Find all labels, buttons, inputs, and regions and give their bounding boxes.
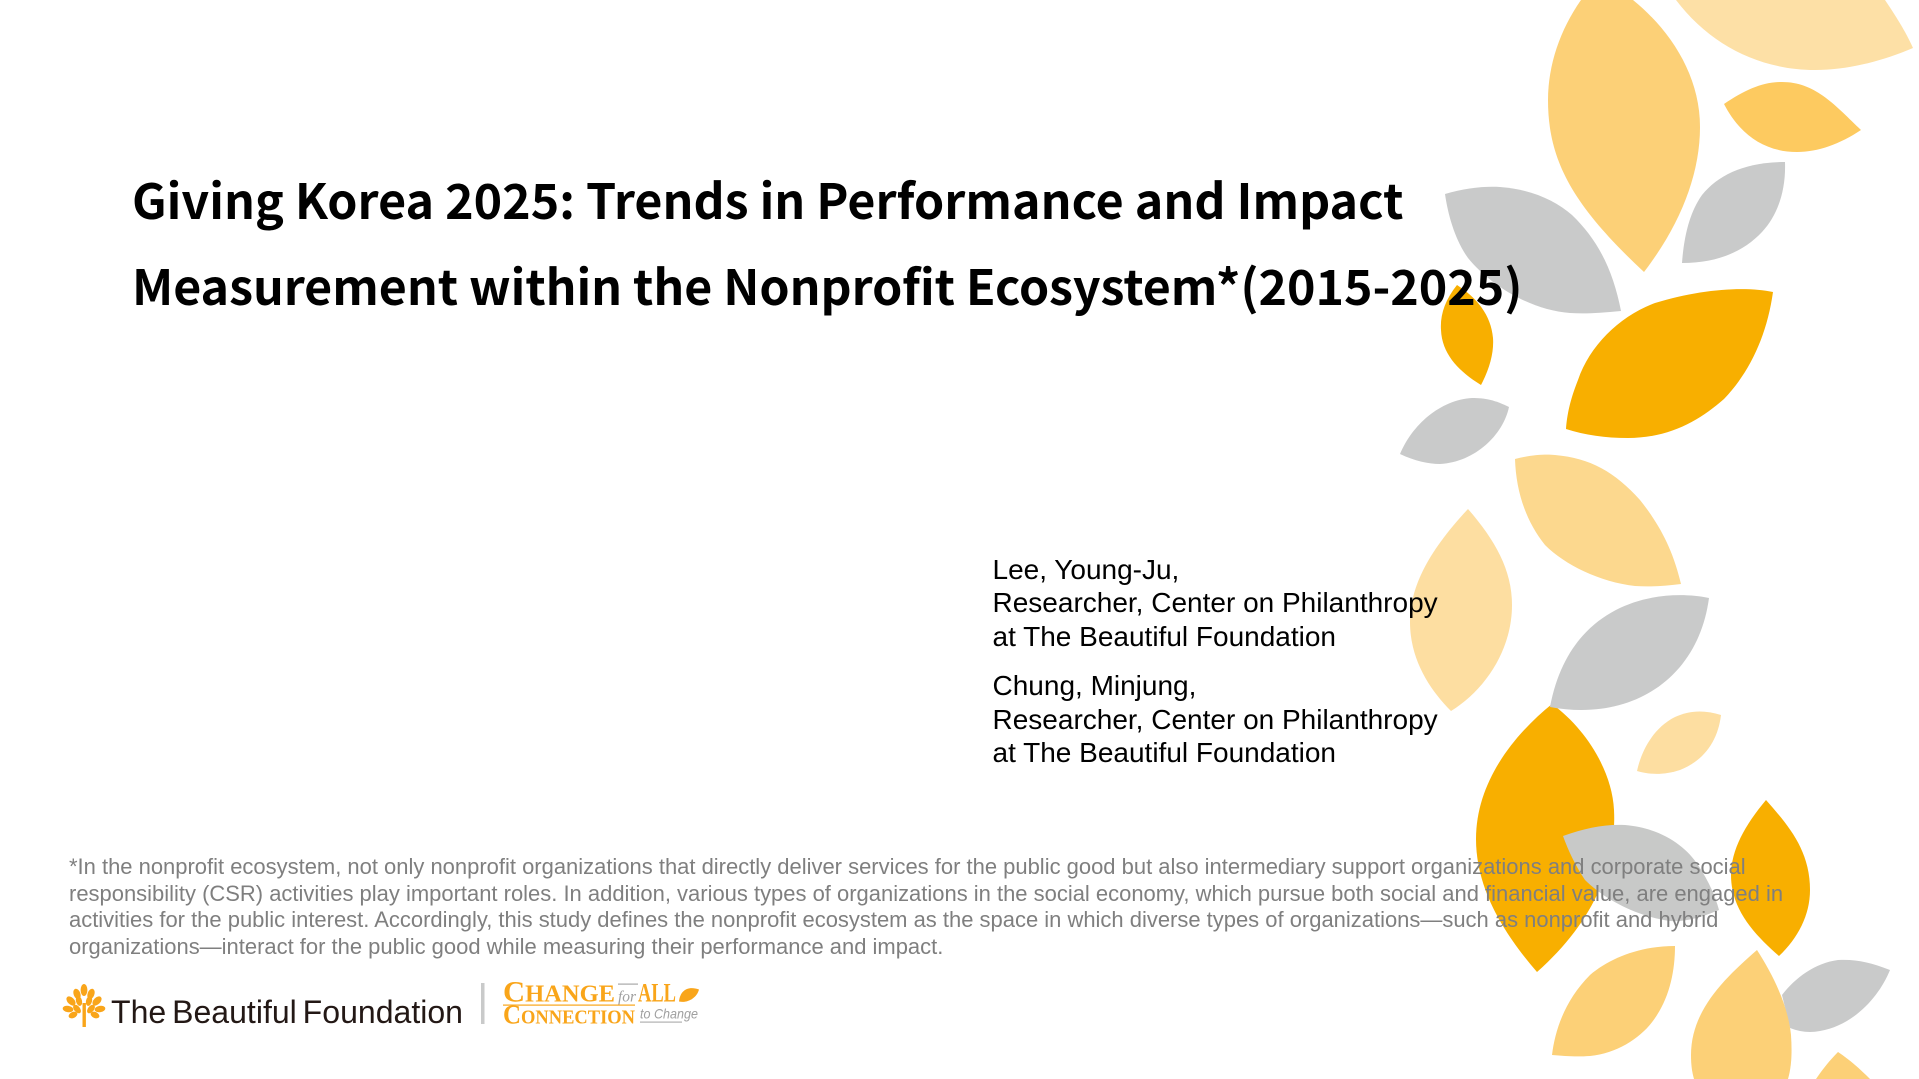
leaf: gray large bbox=[1445, 187, 1621, 313]
leaf: orange right bbox=[1731, 800, 1810, 956]
logo separator bbox=[481, 983, 484, 1024]
leaf: top right pale bbox=[1676, 0, 1913, 70]
leaf: gray overlapping bbox=[1563, 825, 1719, 921]
logo text: Change for All bbox=[503, 976, 699, 1008]
leaf: orange small bbox=[1441, 285, 1493, 385]
logos bbox=[62, 976, 699, 1030]
logo text: Connection to Change: CONNECTION bbox=[503, 1000, 636, 1030]
leaf: small yellow bbox=[1724, 82, 1861, 152]
leaf: yellow bottom bbox=[1552, 946, 1675, 1056]
leaf: yellow bottom tall bbox=[1691, 950, 1792, 1079]
leaf: small pale right bbox=[1637, 711, 1721, 774]
footnote: *In the nonprofit ecosystem, not only nonprofit organizations that directly deliver services for the public good but also intermediary support organizations and corporate social responsibility (CSR) activities play important roles. In addition, various types of organizations in the social economy, which pursue both social and financial value, are engaged in activities for the public interest. Accordingly, this study defines the nonprofit ecosystem as the space in which diverse types of organizations—such as nonprofit and hybrid organizations—interact for the public good while measuring their performance and impact. bbox=[69, 854, 1783, 959]
logo text: The Beautiful Foundation: The Beautiful Foundation bbox=[111, 994, 463, 1030]
leaf: pale middle bbox=[1515, 455, 1681, 586]
leaf: top pale yellow bbox=[1548, 0, 1700, 272]
logo text: Change for All: for bbox=[618, 988, 637, 1006]
leaf: gray small bbox=[1400, 398, 1509, 464]
icon: tree bbox=[62, 984, 106, 1027]
author: Lee, Young-Ju: Lee, Young-Ju, Researcher, Center on Philanthropy at The Beautiful Foundation bbox=[992, 554, 1438, 652]
leaf: pale vertical bbox=[1410, 509, 1512, 711]
leaf: gray bottom right bbox=[1782, 960, 1890, 1032]
title: Giving Korea 2025: Trends in Performance and Impact Measurement within the Nonprofit Ecosystem*(2015-2025) bbox=[132, 163, 1522, 319]
leaf: gray middle arc bbox=[1550, 595, 1709, 710]
leaf: gray upper right bbox=[1682, 162, 1785, 263]
logo text: Change for All: CHANGE bbox=[503, 976, 615, 1008]
leaf: corner tip bbox=[1816, 1052, 1870, 1079]
logo text: Connection to Change: to Change bbox=[640, 1006, 698, 1022]
logo text: Change for All: ALL bbox=[638, 978, 676, 1008]
author: Chung, Minjung: Chung, Minjung, Researcher, Center on Philanthropy at The Beautiful Foundation bbox=[992, 670, 1438, 768]
leaf: orange large bbox=[1566, 289, 1773, 438]
leaf: orange tall bbox=[1476, 704, 1614, 972]
